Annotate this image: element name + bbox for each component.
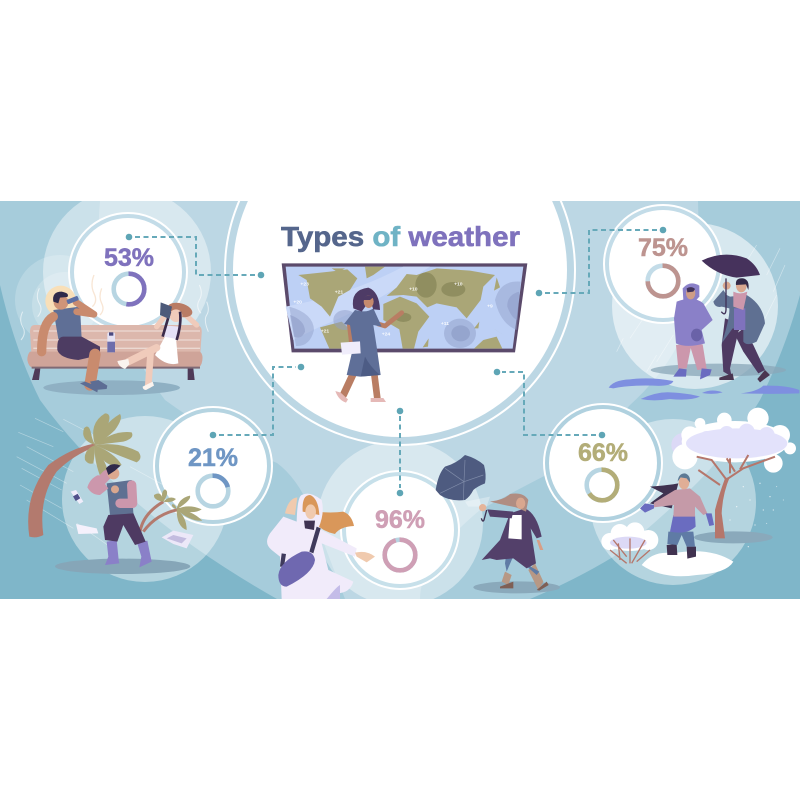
connector 66%: [494, 369, 605, 438]
woman in long coat: [479, 493, 549, 591]
connector 75%: [536, 227, 666, 296]
title: Types of weather: [281, 221, 520, 252]
snow mound: [642, 551, 733, 576]
stat ring 53%: 53%: [104, 244, 154, 272]
woman in sweater: [640, 473, 714, 559]
stat ring 53%: [69, 213, 187, 331]
presenter: [335, 288, 402, 403]
scene: storm, woman in white coat and woman with broken umbrella: [267, 455, 560, 599]
world map panel: +10: [409, 286, 418, 292]
man in wind: [87, 464, 152, 567]
central white circle: [224, 201, 576, 446]
snowy tree: [671, 408, 796, 538]
stat ring 66%: 66%: [578, 439, 628, 467]
snowy bush: [601, 522, 658, 563]
world map panel: +21: [335, 290, 343, 296]
stat ring 75%: 75%: [638, 234, 688, 262]
background band: [0, 201, 800, 599]
pressure systems: [289, 282, 521, 348]
stat ring 96%: [341, 471, 459, 589]
world map panel: +10: [454, 281, 463, 287]
stat ring 96%: 96%: [375, 506, 425, 534]
stat ring 21%: [154, 407, 272, 525]
figure with umbrella: [702, 255, 770, 382]
figure in purple coat: [673, 283, 713, 379]
scene: heat, people on a bench: [21, 275, 208, 395]
scene: hurricane, man and palm trees: [17, 413, 202, 574]
world map panel: +21: [321, 328, 329, 334]
world map panel: +11: [441, 321, 449, 327]
connector 96%: [397, 408, 403, 496]
woman in white coat: [267, 494, 375, 599]
world map panel: +9: [487, 303, 493, 309]
world map panel: +23: [300, 281, 309, 287]
stat ring 21%: 21%: [188, 444, 238, 472]
scene: snow, woman and tree: [601, 408, 796, 576]
world map panel: +24: [382, 332, 390, 338]
halo circles: [15, 188, 778, 606]
stat ring 75%: [604, 205, 722, 323]
stat ring 66%: [544, 404, 662, 522]
scene: rain, couple with umbrella: [609, 245, 799, 400]
connector 53%: [126, 234, 264, 278]
world map panel: +20: [293, 300, 302, 306]
world map panel: [282, 263, 527, 403]
palm fronds: [83, 413, 140, 480]
land masses: [298, 267, 503, 349]
connector 21%: [210, 364, 304, 438]
broken umbrella: [436, 455, 490, 521]
